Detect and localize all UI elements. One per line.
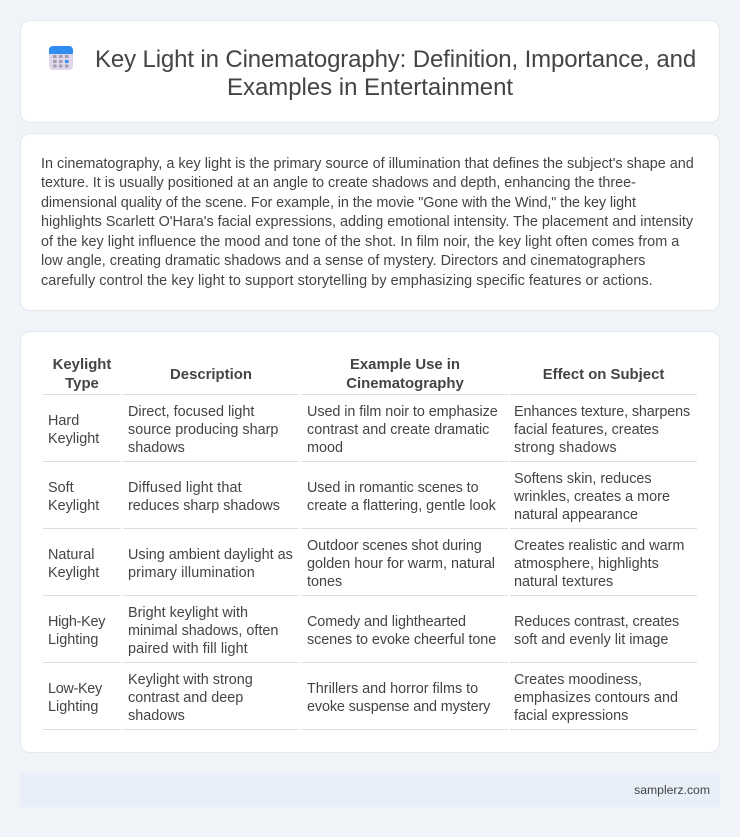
row: High-Key Lighting: Bright keylight with	[128, 605, 248, 621]
row: Low-Key Lighting: Thrillers and horror films to	[307, 681, 478, 697]
heading: Key Light in Cinematography: Definition, Importance, and	[95, 46, 696, 73]
row: Hard Keylight: facial features, creates	[514, 422, 659, 438]
row: Hard Keylight: Enhances texture, sharpens	[514, 404, 690, 420]
row: Soft Keylight: Keylight	[48, 498, 99, 514]
table header	[53, 357, 664, 392]
row: Natural Keylight	[43, 528, 697, 590]
row: Hard Keylight: Used in film noir to emphasize	[307, 404, 498, 420]
panel: introduction	[20, 133, 720, 311]
row: High-Key Lighting: soft and evenly lit image	[514, 632, 668, 648]
row: High-Key Lighting: Comedy and lighthearted	[307, 614, 466, 630]
intro paragraph: of the key light influence the mood and tone of the shot. In film noir, the key light often comes from a	[41, 234, 679, 250]
row: High-Key Lighting	[43, 595, 697, 657]
row: Hard Keylight: strong shadows	[514, 440, 617, 456]
row: High-Key Lighting: High-Key	[48, 614, 105, 630]
row: Low-Key Lighting: Keylight with strong	[128, 672, 253, 688]
row: Hard Keylight: Hard	[48, 413, 79, 429]
intro paragraph	[41, 156, 694, 289]
row: Hard Keylight: Keylight	[48, 431, 99, 447]
row: Low-Key Lighting	[43, 662, 697, 730]
row: Natural Keylight: atmosphere, highlights	[514, 556, 659, 572]
row: Natural Keylight: golden hour for warm, natural	[307, 556, 495, 572]
row: Hard Keylight: contrast and create dramatic	[307, 422, 489, 438]
panel: table card	[20, 331, 720, 753]
row: Natural Keylight: Natural	[48, 547, 94, 563]
row: Low-Key Lighting: Low-Key	[48, 681, 102, 697]
table header: Description	[170, 367, 252, 383]
row: Hard Keylight: mood	[307, 440, 343, 456]
row: Hard Keylight: Direct, focused light	[128, 404, 254, 420]
row: High-Key Lighting: paired with fill light	[128, 641, 248, 657]
row: Natural Keylight: Creates realistic and warm	[514, 538, 684, 554]
row: High-Key Lighting: minimal shadows, often	[128, 623, 278, 639]
row: Soft Keylight: Soft	[48, 480, 74, 496]
intro paragraph: In cinematography, a key light is the primary source of illumination that defines the subject's shape and	[41, 156, 694, 172]
row: High-Key Lighting: Lighting	[48, 632, 98, 648]
row: Low-Key Lighting: facial expressions	[514, 708, 628, 724]
table header: Example Use in	[350, 357, 460, 373]
row: Soft Keylight: Diffused light that	[128, 480, 242, 496]
row: Low-Key Lighting: Lighting	[48, 699, 98, 715]
table header: Effect on Subject	[543, 367, 664, 383]
intro paragraph: dimensional quality of the scene. For example, in the movie "Gone with the Wind," the key light	[41, 195, 636, 211]
row: Natural Keylight: Keylight	[48, 565, 99, 581]
row: Hard Keylight: source producing sharp	[128, 422, 278, 438]
row: High-Key Lighting: Reduces contrast, creates	[514, 614, 679, 630]
footer source text: samplerz.com	[634, 783, 710, 797]
row: Soft Keylight	[43, 461, 697, 523]
heading	[95, 46, 696, 101]
row: Natural Keylight: natural textures	[514, 574, 613, 590]
table header: Keylight	[53, 357, 111, 373]
row: Low-Key Lighting: emphasizes contours and	[514, 690, 678, 706]
row: Hard Keylight: shadows	[128, 440, 185, 456]
row: Low-Key Lighting: shadows	[128, 708, 185, 724]
row: High-Key Lighting: scenes to evoke cheerful tone	[307, 632, 496, 648]
row: Soft Keylight: create a flattering, gentle look	[307, 498, 496, 514]
row: Soft Keylight: wrinkles, creates a more	[514, 489, 670, 505]
row: Low-Key Lighting: Creates moodiness,	[514, 672, 642, 688]
intro paragraph: low angle, creating dramatic shadows and a sense of mystery. Directors and cinematographers	[41, 253, 645, 269]
footer bar	[20, 773, 720, 807]
heading: Examples in Entertainment	[227, 74, 513, 101]
intro paragraph: texture. It is usually positioned at an angle to create shadows and depth, enhancing the three-	[41, 175, 636, 191]
row: Low-Key Lighting: contrast and deep	[128, 690, 243, 706]
intro paragraph: carefully control the key light to support storytelling by emphasizing specific features or actions.	[41, 273, 653, 289]
row: Hard Keylight	[43, 394, 697, 456]
table header: Type	[65, 376, 99, 392]
row: Natural Keylight: Using ambient daylight as	[128, 547, 293, 563]
row: Natural Keylight: tones	[307, 574, 342, 590]
row: Low-Key Lighting: evoke suspense and mystery	[307, 699, 490, 715]
row: Soft Keylight: reduces sharp shadows	[128, 498, 280, 514]
intro paragraph: highlights Scarlett O'Hara's facial expressions, adding emotional intensity. The placement and intensity	[41, 214, 693, 230]
row: Soft Keylight: Softens skin, reduces	[514, 471, 652, 487]
icon: calendar	[49, 46, 73, 70]
row: Natural Keylight: Outdoor scenes shot during	[307, 538, 482, 554]
row: Soft Keylight: Used in romantic scenes to	[307, 480, 478, 496]
row: Natural Keylight: primary illumination	[128, 565, 255, 581]
table header: Cinematography	[346, 376, 464, 392]
title card	[20, 20, 720, 123]
row: Soft Keylight: natural appearance	[514, 507, 638, 523]
